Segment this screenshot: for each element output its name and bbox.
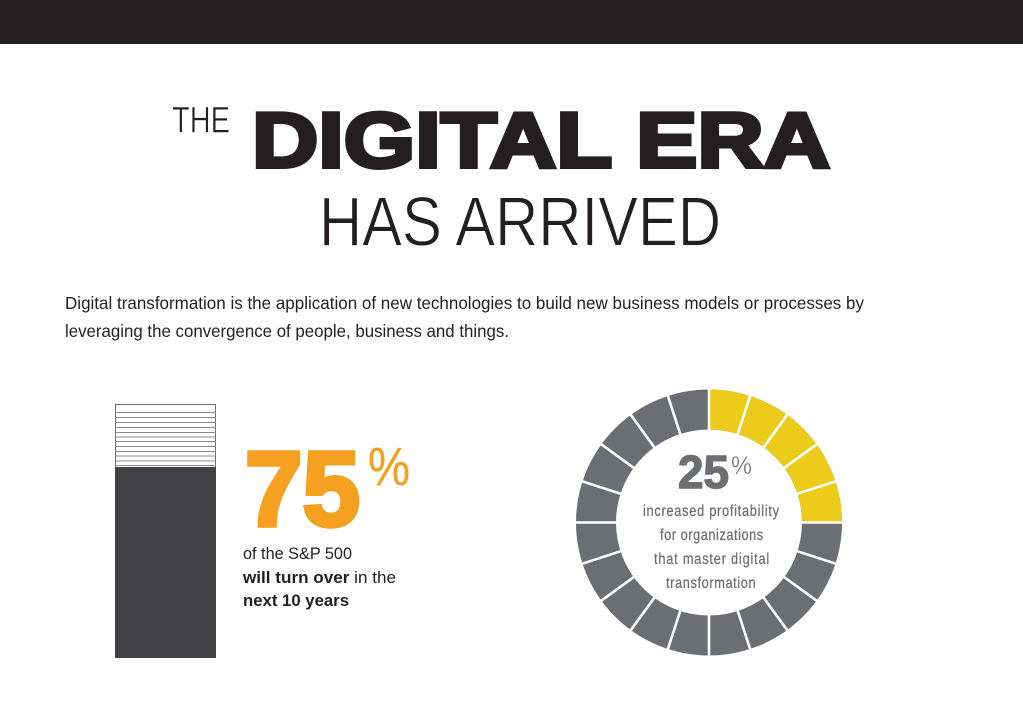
top black band [0, 0, 1023, 44]
intro paragraph [65, 293, 864, 341]
percent sign: % [368, 437, 410, 497]
S&P 500 caption: next 10 years [243, 591, 349, 610]
title words: HAS ARRIVED: HAS ARRIVED [319, 182, 721, 260]
title words: DIGITAL ERA: DIGITAL ERA [252, 96, 830, 184]
donut caption: transformation [666, 575, 756, 592]
intro paragraph: Digital transformation is the application of new technologies to build new business models or processes by [65, 293, 864, 313]
number 75: 75 [245, 430, 360, 548]
S&P 500 caption: of the S&P 500 [243, 544, 352, 563]
S&P 500 caption: will turn over in the [242, 568, 396, 587]
intro paragraph: leveraging the convergence of people, business and things. [65, 321, 509, 341]
S&P 500 caption [242, 544, 396, 610]
donut caption [643, 503, 780, 592]
donut caption: for organizations [660, 527, 763, 544]
donut caption: increased profitability [643, 503, 780, 520]
stat: 25 percent [678, 446, 752, 498]
title word: THE: THE [172, 100, 230, 140]
stat: 75 percent [245, 430, 410, 548]
small percent sign: % [731, 452, 752, 480]
title [172, 96, 830, 260]
donut chart: 25 percent of 20 segments [572, 386, 846, 659]
bar chart: 75 percent filled column [115, 404, 216, 658]
number 25: 25 [678, 446, 729, 498]
donut caption: that master digital [654, 551, 769, 568]
